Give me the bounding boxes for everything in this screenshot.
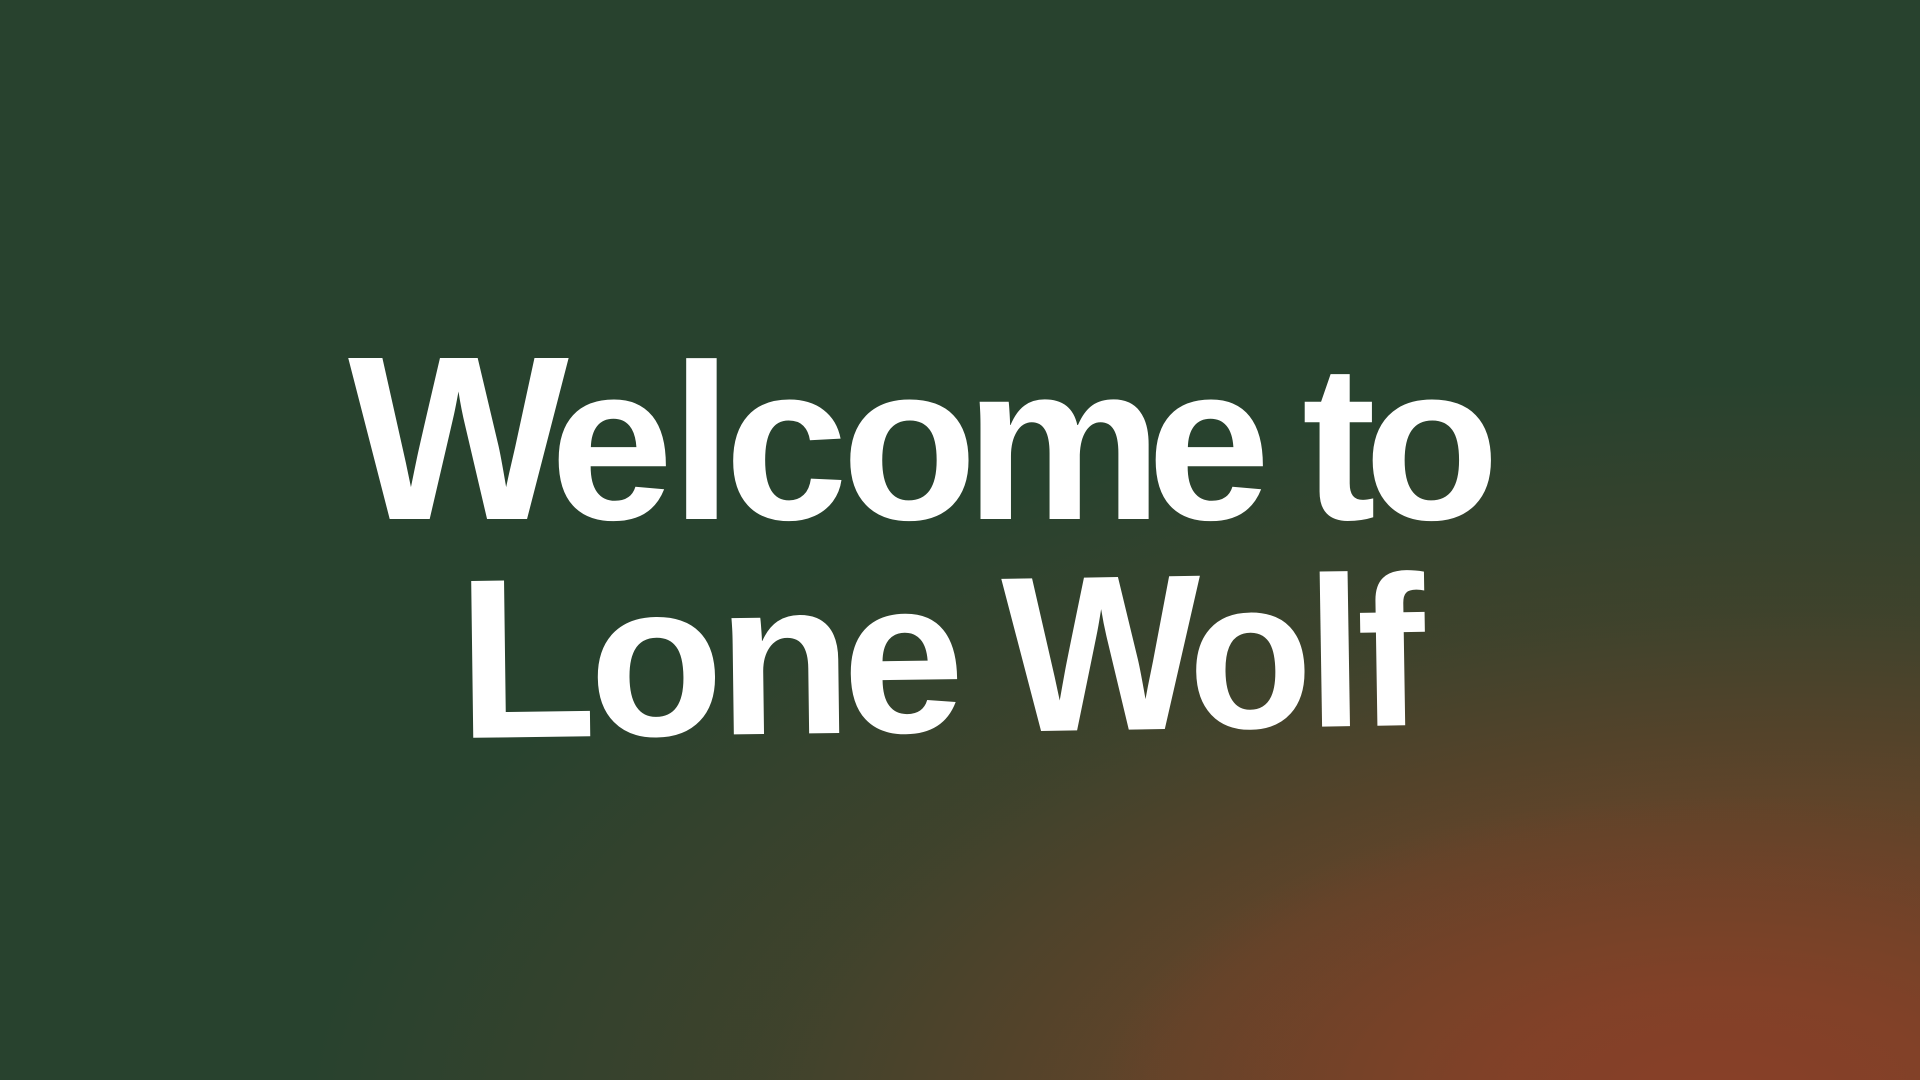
title line 1: W <box>348 307 569 569</box>
word: Wolf: olf <box>1186 532 1427 775</box>
word: Wolf: W <box>1000 528 1204 779</box>
word: Lone: one <box>587 532 966 783</box>
title line 2 <box>455 524 1427 787</box>
title line 1: elcome to <box>550 319 1500 567</box>
word: Lone: L <box>455 531 598 787</box>
